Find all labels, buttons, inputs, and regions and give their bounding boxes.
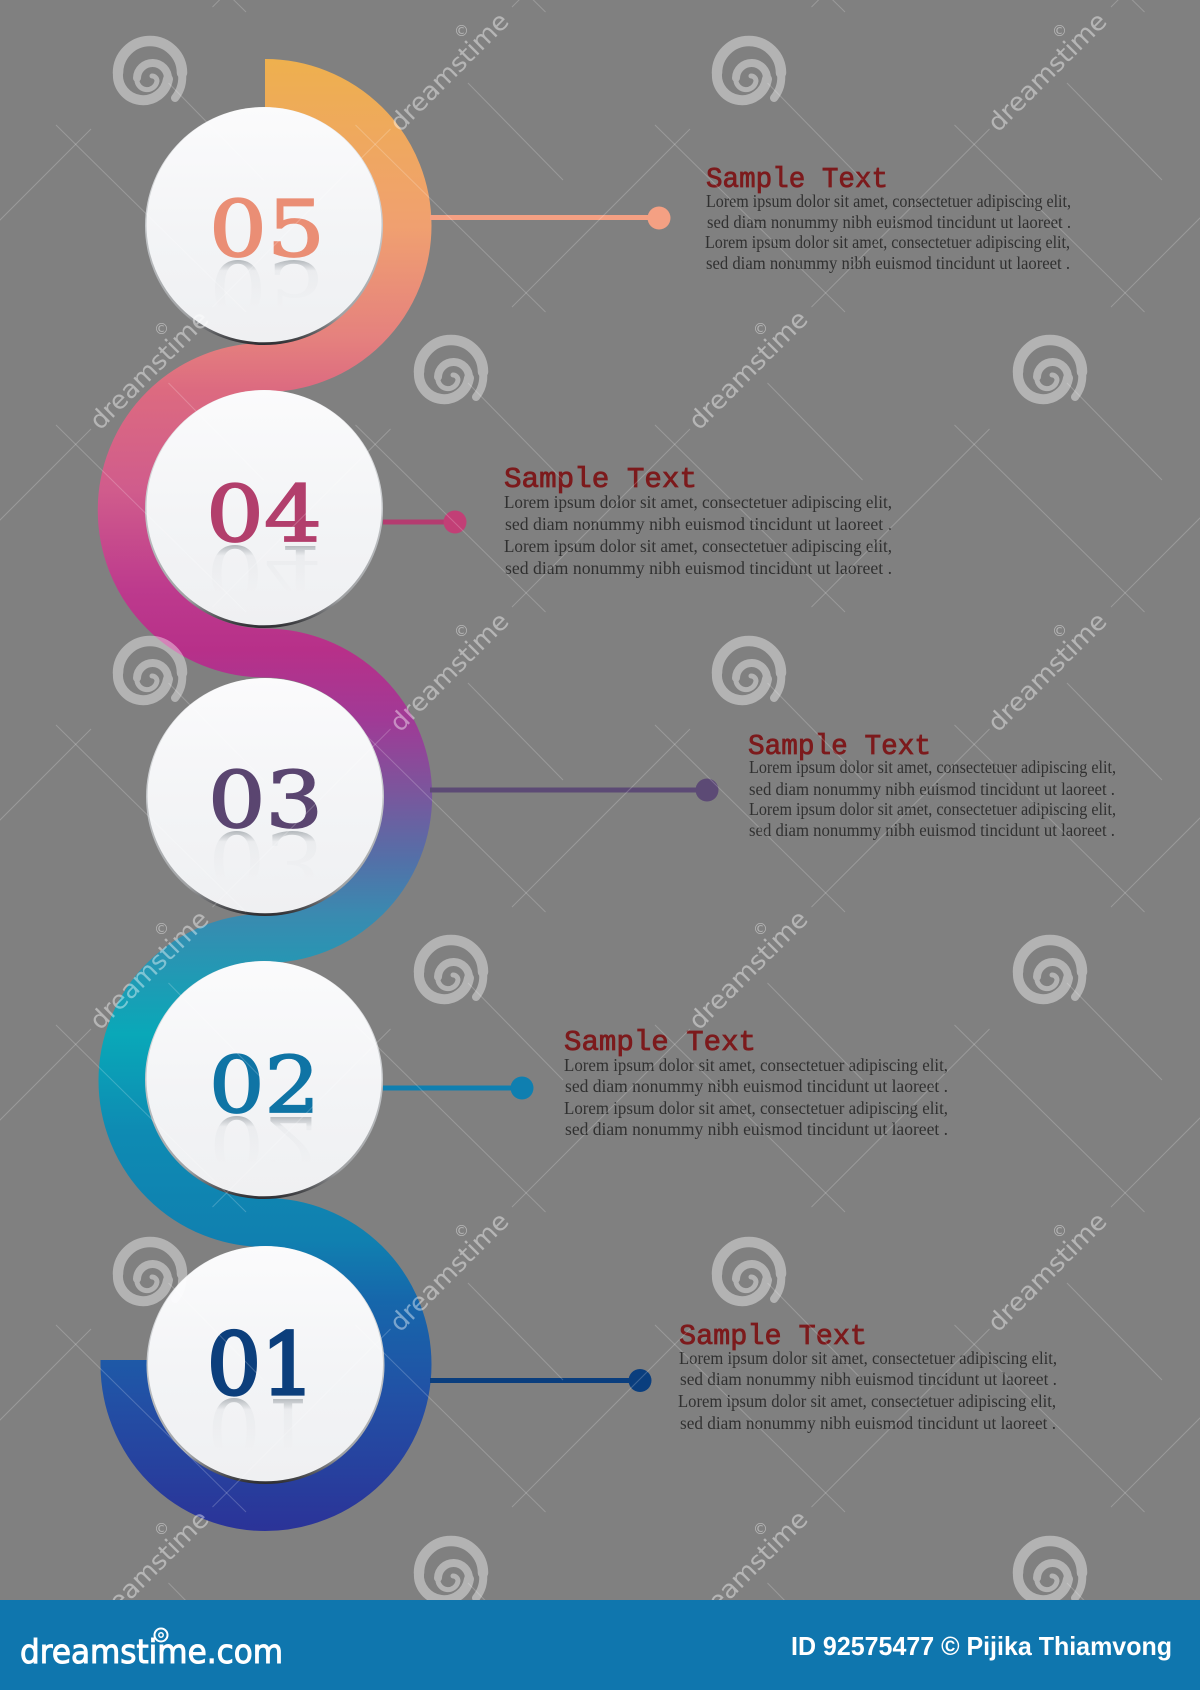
- reflection 05: 05: [209, 242, 325, 332]
- watermark layer: dreamstime: [384, 1206, 515, 1337]
- body 01: Lorem ipsum dolor sit amet, consectetuer adipiscing elit,: [678, 1391, 1056, 1411]
- text block 03: [748, 730, 1116, 840]
- watermark layer: ©: [1052, 1222, 1067, 1240]
- body 05: Lorem ipsum dolor sit amet, consectetuer adipiscing elit,: [706, 191, 1071, 211]
- watermark layer: ©: [1052, 22, 1067, 40]
- body 04: Lorem ipsum dolor sit amet, consectetuer adipiscing elit,: [504, 492, 892, 512]
- watermark layer: ©: [1052, 622, 1067, 640]
- watermark layer: dreamstime: [982, 6, 1113, 137]
- body 03: Lorem ipsum dolor sit amet, consectetuer adipiscing elit,: [749, 799, 1116, 819]
- number 01: 01: [207, 1316, 315, 1415]
- watermark layer: ©: [753, 1520, 768, 1538]
- watermark layer: dreamstime: [982, 1206, 1113, 1337]
- watermark layer: dreamstime: [683, 1504, 814, 1635]
- step 02 disc: [145, 961, 383, 1199]
- body 01: [678, 1348, 1057, 1433]
- step 03 disc: [146, 678, 384, 916]
- text block 01: [678, 1320, 1057, 1433]
- watermark layer: dreamstime: [982, 606, 1113, 737]
- body 01: sed diam nonummy nibh euismod tincidunt ut laoreet .: [680, 1369, 1057, 1389]
- number 02: 02: [209, 1041, 320, 1131]
- connector 04: [383, 510, 466, 534]
- body 02: [564, 1055, 948, 1139]
- number 04: 04: [206, 470, 322, 560]
- watermark layer: dreamstime: [384, 6, 515, 137]
- reflection 01: 01: [207, 1378, 315, 1477]
- watermark layer: ©: [154, 920, 169, 938]
- watermark layer: dreamstime: [84, 1504, 215, 1635]
- step 01 disc: [146, 1246, 384, 1484]
- body 05: sed diam nonummy nibh euismod tincidunt ut laoreet .: [706, 253, 1070, 273]
- body 03: Lorem ipsum dolor sit amet, consectetuer adipiscing elit,: [749, 757, 1116, 777]
- step 04 disc: [145, 390, 383, 628]
- connector 02: [383, 1076, 534, 1100]
- body 01: Lorem ipsum dolor sit amet, consectetuer adipiscing elit,: [679, 1348, 1057, 1368]
- heading 05: Sample Text: [706, 163, 888, 196]
- watermark layer: ©: [454, 22, 469, 40]
- footer credit: ID 92575477 © Pijika Thiamvong: [791, 1631, 1172, 1661]
- footer band: [0, 1600, 1200, 1690]
- reflection 04: 04: [206, 527, 322, 617]
- watermark layer: ©: [154, 320, 169, 338]
- reflection 03: 03: [208, 813, 323, 903]
- text block 04: [504, 463, 892, 578]
- connector 03: [430, 778, 718, 802]
- connector 05: [430, 206, 670, 230]
- number 05: 05: [209, 185, 325, 275]
- body 04: [504, 492, 892, 578]
- text block 05: [705, 163, 1071, 273]
- ribbon: S-curve gradient band: [122, 84, 408, 1506]
- body 05: [705, 191, 1071, 273]
- watermark layer: ©: [753, 920, 768, 938]
- footer logo: dreamstime.com: [20, 1632, 283, 1671]
- body 01: sed diam nonummy nibh euismod tincidunt ut laoreet .: [680, 1413, 1056, 1433]
- watermark layer: dreamstime: [84, 904, 215, 1035]
- body 02: sed diam nonummy nibh euismod tincidunt ut laoreet .: [565, 1119, 948, 1139]
- heading 03: Sample Text: [748, 730, 931, 763]
- step 05 disc: [145, 107, 383, 345]
- watermark layer: ©: [454, 1222, 469, 1240]
- heading 02: Sample Text: [564, 1026, 756, 1059]
- watermark layer: ©: [753, 320, 768, 338]
- body 05: Lorem ipsum dolor sit amet, consectetuer adipiscing elit,: [705, 232, 1070, 252]
- body 03: sed diam nonummy nibh euismod tincidunt ut laoreet .: [749, 779, 1115, 799]
- body 05: sed diam nonummy nibh euismod tincidunt ut laoreet .: [707, 212, 1071, 232]
- reflection 02: 02: [209, 1098, 320, 1188]
- text block 02: [564, 1026, 948, 1139]
- watermark layer: dreamstime: [683, 304, 814, 435]
- body 03: [749, 757, 1116, 840]
- body 04: Lorem ipsum dolor sit amet, consectetuer adipiscing elit,: [504, 536, 892, 556]
- body 04: sed diam nonummy nibh euismod tincidunt ut laoreet .: [505, 514, 892, 534]
- body 02: Lorem ipsum dolor sit amet, consectetuer adipiscing elit,: [564, 1055, 948, 1075]
- number 03: 03: [208, 756, 323, 846]
- heading 01: Sample Text: [679, 1320, 867, 1353]
- heading 04: Sample Text: [504, 463, 697, 496]
- watermark layer: ©: [454, 622, 469, 640]
- connector 01: [430, 1369, 652, 1392]
- watermark layer: dreamstime: [683, 904, 814, 1035]
- body 04: sed diam nonummy nibh euismod tincidunt ut laoreet .: [505, 558, 892, 578]
- watermark layer: ©: [154, 1520, 169, 1538]
- body 02: Lorem ipsum dolor sit amet, consectetuer adipiscing elit,: [564, 1098, 948, 1118]
- body 02: sed diam nonummy nibh euismod tincidunt ut laoreet .: [565, 1076, 948, 1096]
- watermark layer: dreamstime: [384, 606, 515, 737]
- body 03: sed diam nonummy nibh euismod tincidunt ut laoreet .: [749, 820, 1115, 840]
- watermark layer: dreamstime: [84, 304, 215, 435]
